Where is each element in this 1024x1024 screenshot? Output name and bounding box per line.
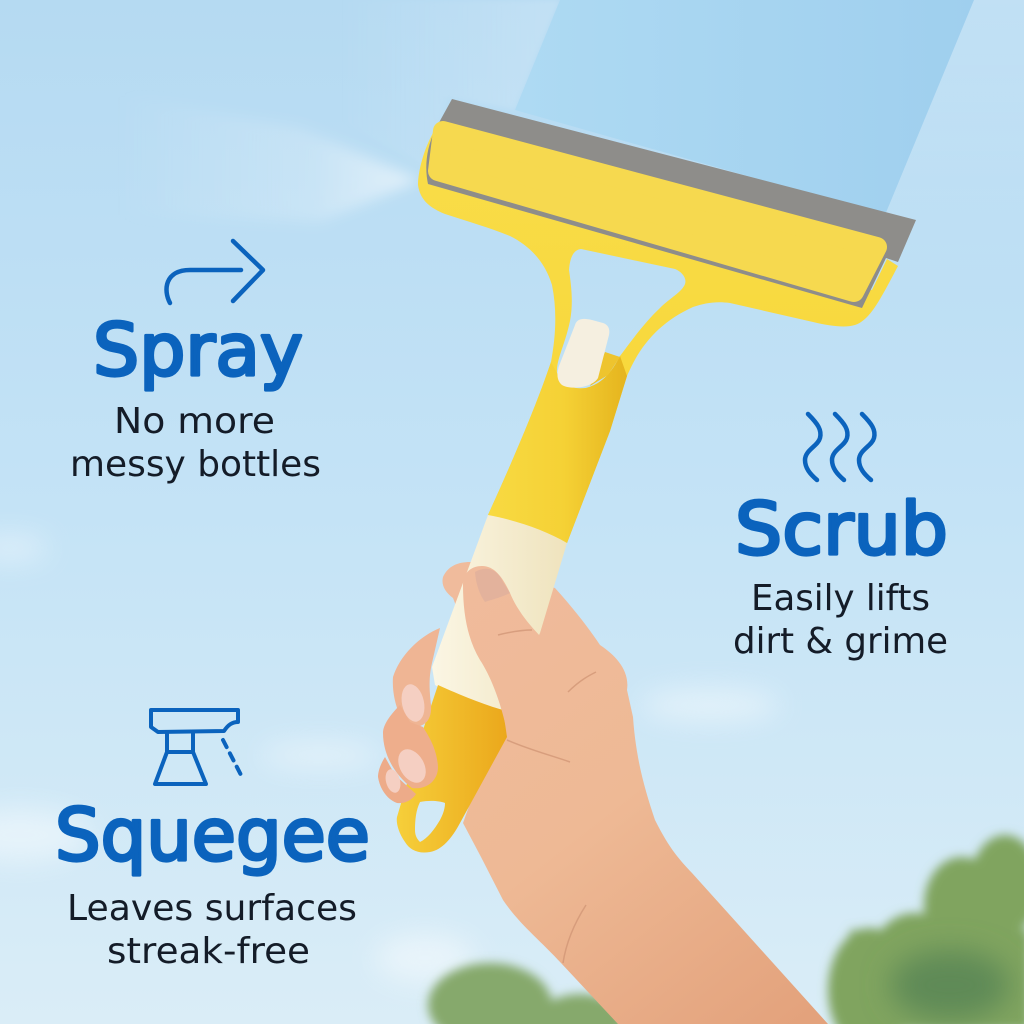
heading: Squegee: Squegee xyxy=(55,793,370,877)
hand front xyxy=(378,566,600,963)
hand back xyxy=(442,562,828,1024)
clouds xyxy=(0,536,780,982)
hand creases xyxy=(498,630,596,963)
right tree xyxy=(828,835,1024,1024)
lower finger xyxy=(378,757,416,803)
heading: Spray: Spray xyxy=(93,308,303,392)
right pale window band xyxy=(860,0,1024,300)
caption: scrub line 2: dirt & grime xyxy=(733,621,948,662)
cleaned window streak xyxy=(515,0,974,215)
caption: spray line 2: messy bottles xyxy=(70,444,321,485)
caption: squeegee line 1: Leaves surfaces xyxy=(67,888,357,929)
middle finger xyxy=(383,705,438,788)
handle base xyxy=(397,685,507,853)
icon: arrow xyxy=(167,241,263,303)
caption: squeegee line 2: streak-free xyxy=(107,931,310,972)
inner yellow piece xyxy=(590,352,620,386)
handle shading xyxy=(488,356,627,543)
squeegee xyxy=(418,99,916,543)
sponge xyxy=(438,131,877,292)
handle xyxy=(397,515,567,853)
thumb nail xyxy=(475,569,510,602)
thumb xyxy=(463,566,600,770)
left tree xyxy=(428,963,625,1024)
icon: scrub waves xyxy=(805,414,874,480)
heading: Scrub: Scrub xyxy=(735,487,948,571)
nozzle xyxy=(557,319,609,388)
trees xyxy=(428,835,1024,1024)
light haze beside cleaned streak xyxy=(340,0,560,170)
icon: spray bottle xyxy=(151,710,241,784)
caption: scrub line 1: Easily lifts xyxy=(751,578,930,619)
finger nails xyxy=(383,682,431,794)
rubber blade xyxy=(426,99,916,308)
handle grip xyxy=(432,515,567,710)
yellow frame and arms xyxy=(418,128,898,543)
caption: spray line 1: No more xyxy=(114,401,275,442)
right tree shadow xyxy=(890,950,1010,1020)
top finger xyxy=(393,628,440,727)
spray mist xyxy=(120,95,420,222)
